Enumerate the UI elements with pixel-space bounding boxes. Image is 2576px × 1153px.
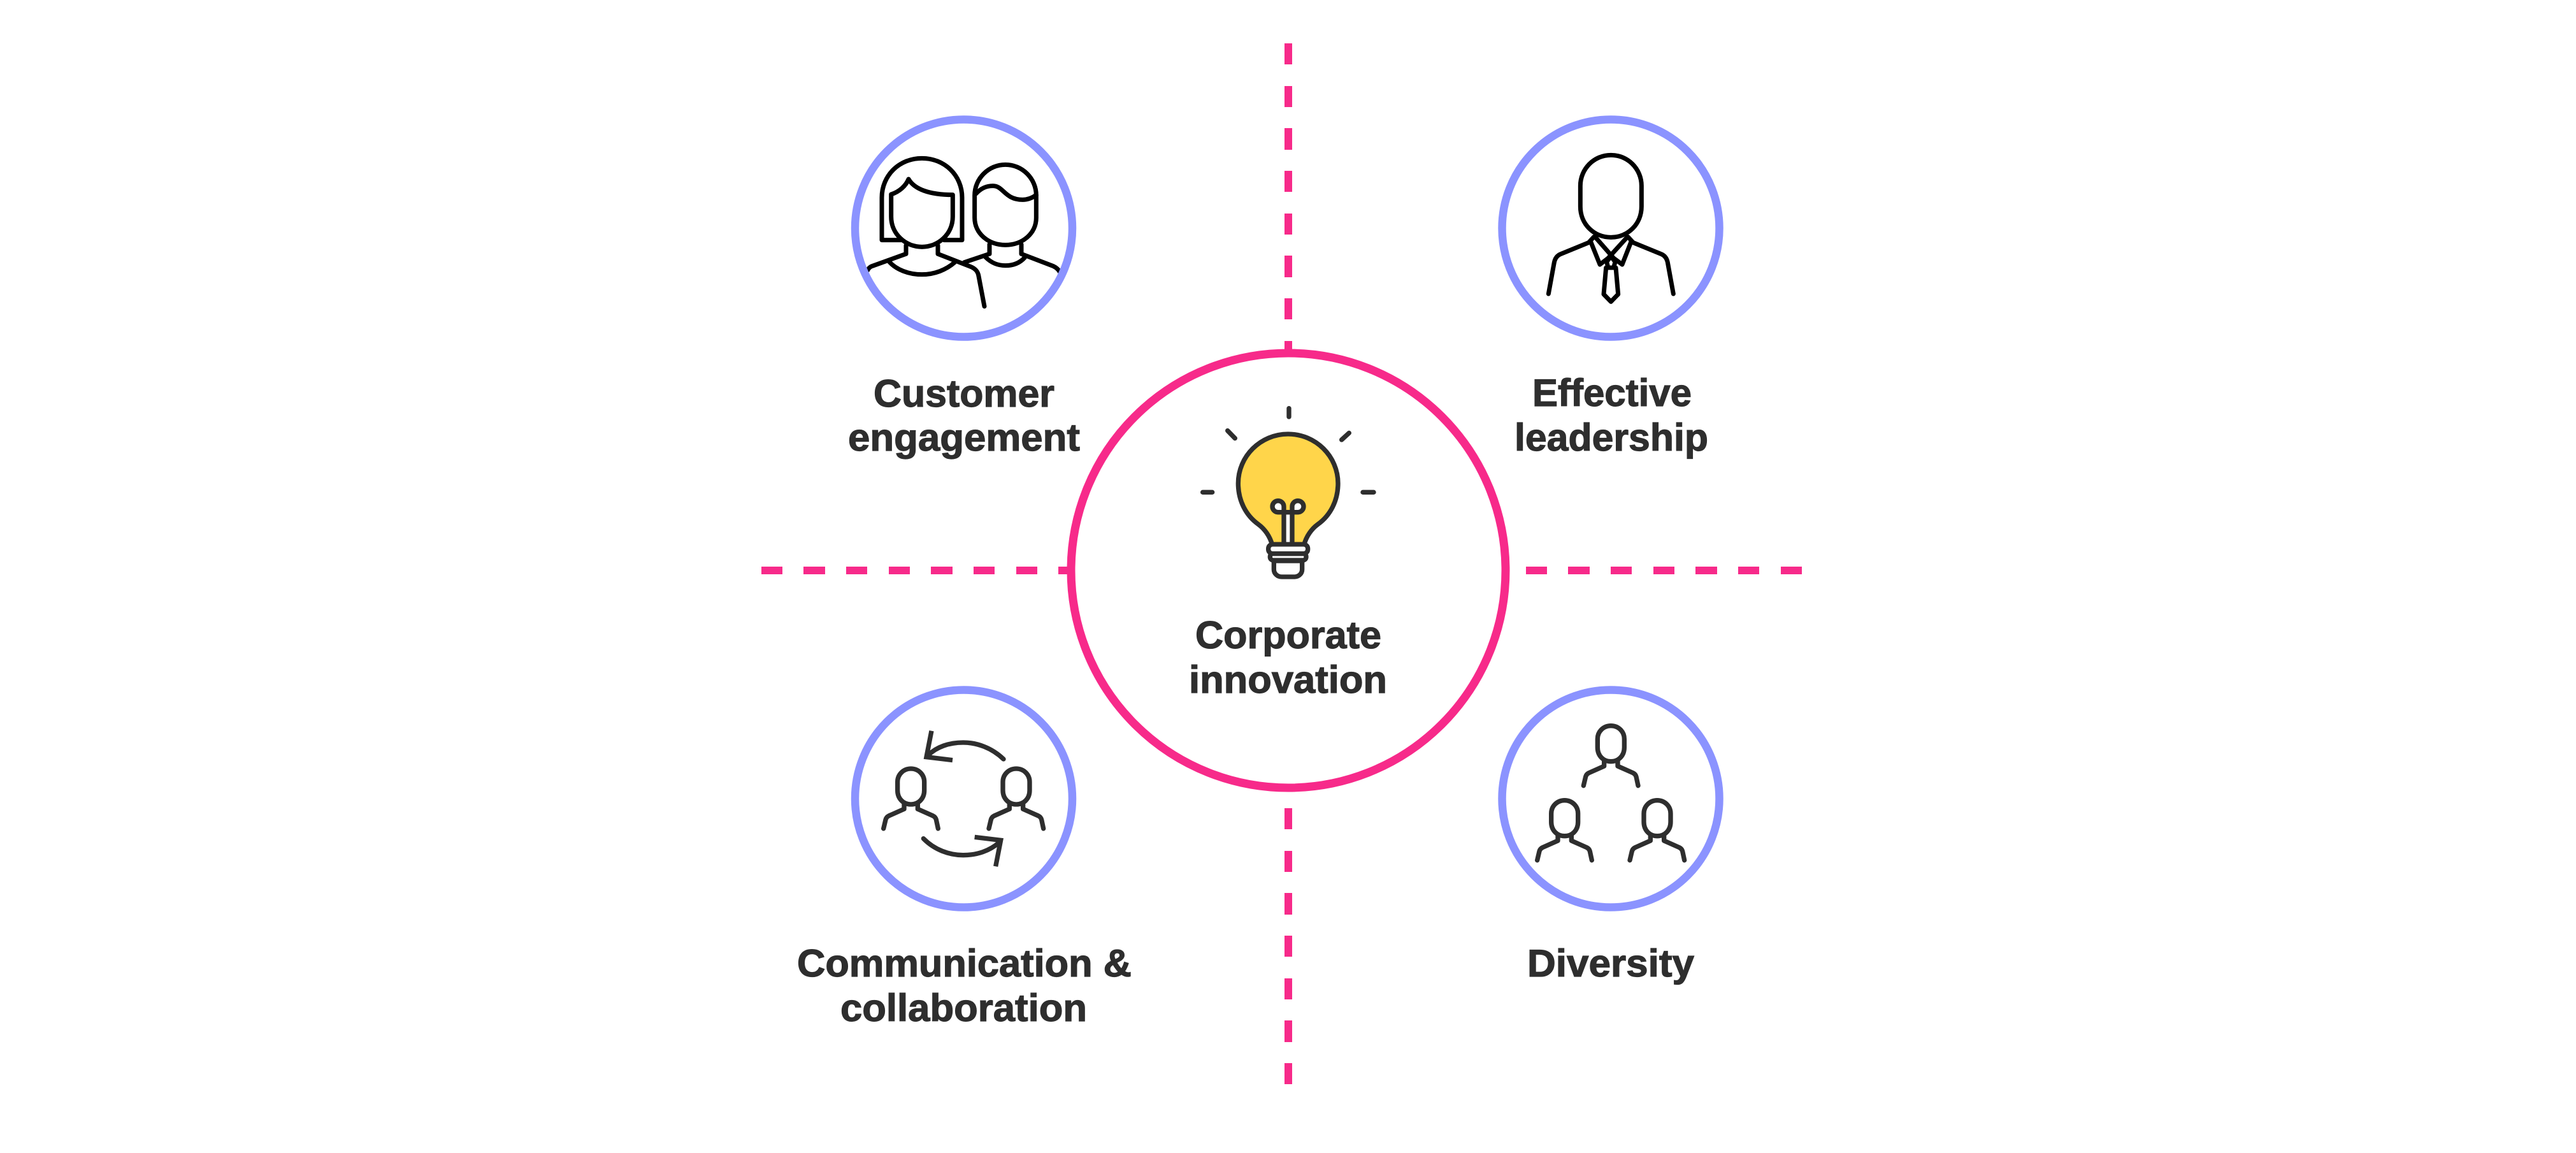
ring: communication and collaboration [855,690,1072,908]
icon: communication and collaboration, two people with arrows [884,731,1044,866]
icon: effective leadership, person with tie [1548,155,1673,301]
label: customer engagement [848,372,1080,459]
label: effective leadership: leadership [1515,416,1708,459]
label: communication and collaboration: Communication & [797,942,1132,985]
icon: diversity, three people [1537,726,1685,860]
ring: diversity [1502,690,1719,908]
dashed divider: top vertical [1284,43,1292,352]
dashed divider: left horizontal [761,567,1071,574]
label: effective leadership: Effective [1532,372,1692,414]
ring: effective leadership [1502,120,1719,337]
ring: customer engagement [855,120,1072,337]
label: corporate innovation: Corporate [1195,614,1381,656]
label: communication and collaboration: collaboration [840,987,1087,1029]
dashed divider: bottom vertical [1284,808,1292,1084]
label: corporate innovation [1189,614,1387,701]
label: customer engagement: engagement [848,416,1080,459]
icon: light bulb [1203,409,1374,577]
dashed divider: right horizontal [1526,567,1802,574]
label: communication and collaboration [797,942,1132,1029]
label: diversity: Diversity [1527,942,1695,985]
label: corporate innovation: innovation [1189,658,1387,701]
icon: customer engagement, two people [868,158,1060,307]
label: customer engagement: Customer [874,372,1054,415]
label: effective leadership [1515,372,1708,459]
central circle: corporate innovation [1071,353,1506,788]
